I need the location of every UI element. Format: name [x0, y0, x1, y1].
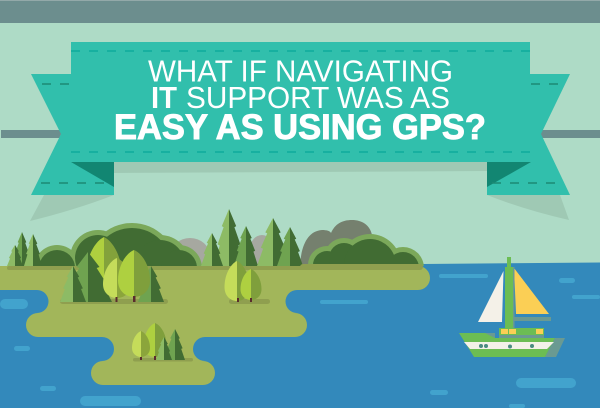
- title: EASY AS USING GPS?: [114, 108, 486, 147]
- ground shadow strips: [7, 264, 423, 362]
- water highlights: [0, 274, 600, 408]
- ribbon tail stitching: [41, 84, 561, 183]
- centre fir trees on horizon: [201, 209, 303, 266]
- two leaf trees: [224, 261, 262, 302]
- horizontal road band right: [541, 130, 600, 138]
- ribbon left fold: [71, 162, 114, 187]
- title: IT: [151, 80, 177, 115]
- ribbon right tail: [487, 74, 570, 195]
- ribbon right fold: [487, 162, 531, 187]
- title: [114, 54, 486, 147]
- title: WHAT IF NAVIGATING: [148, 54, 453, 88]
- horizontal road band left: [1, 130, 61, 138]
- small tree group: [132, 323, 185, 360]
- large tree group: [60, 237, 164, 302]
- rocks behind forest: [170, 220, 372, 274]
- title: SUPPORT WAS AS: [186, 80, 450, 115]
- island land: [0, 266, 430, 385]
- water: [0, 262, 600, 408]
- far left fir trees: [7, 232, 42, 266]
- ribbon left tail: [31, 74, 114, 195]
- ribbon shadows: [30, 134, 569, 221]
- top bar: [0, 0, 600, 23]
- ribbon main panel: [71, 42, 530, 162]
- ribbon main stitching: [71, 51, 530, 152]
- sailboat: [459, 257, 565, 357]
- left bush: [38, 223, 202, 266]
- right bush: [308, 234, 424, 266]
